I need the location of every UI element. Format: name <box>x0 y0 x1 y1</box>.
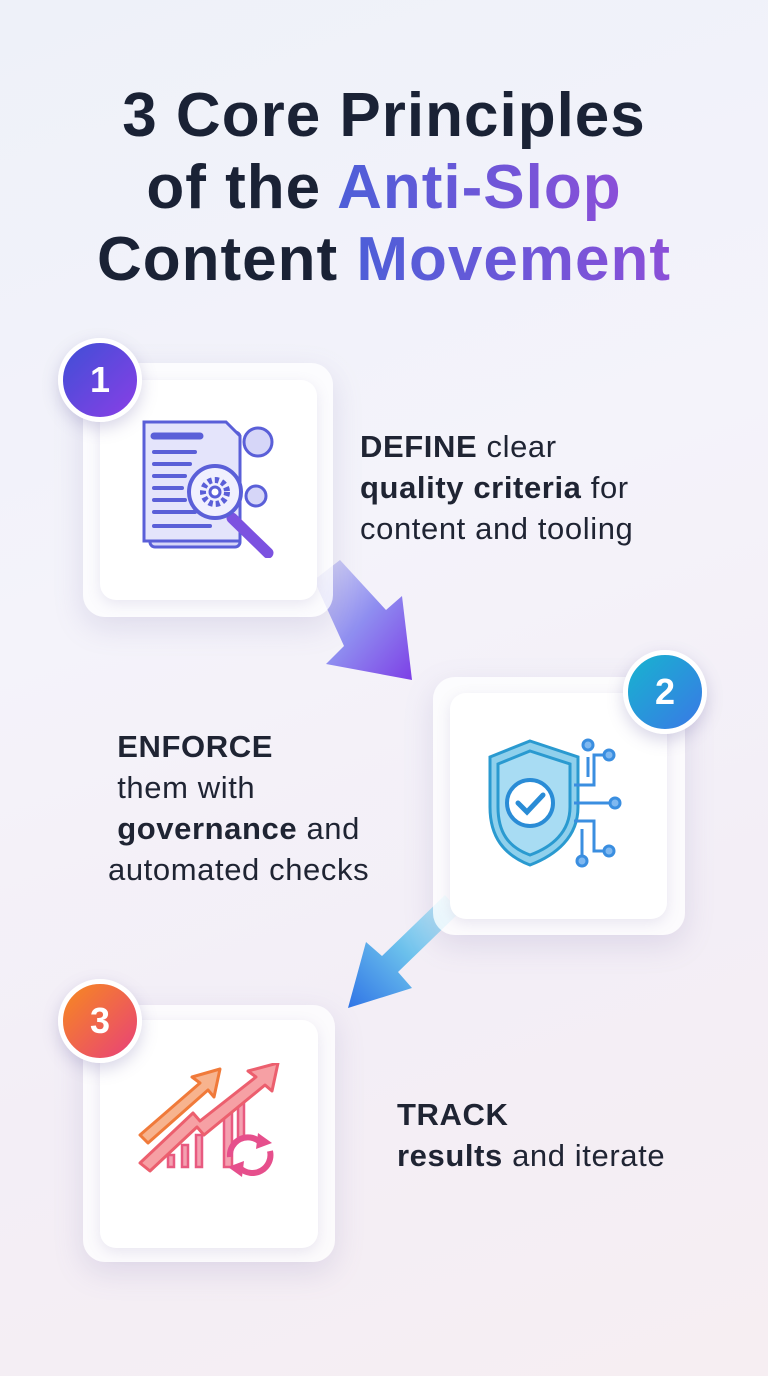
text 2 <box>108 729 369 887</box>
text 2: automated checks <box>108 852 369 887</box>
card 1 <box>83 363 333 617</box>
icon: document with magnifier and gears <box>142 420 274 558</box>
text 3: results and iterate <box>397 1138 665 1173</box>
title: of the Anti-Slop <box>146 153 622 222</box>
text 3 <box>397 1097 665 1173</box>
badge 2: 2 <box>655 671 675 712</box>
icon: growth arrows with refresh <box>138 1063 280 1177</box>
badge 1 <box>58 338 142 422</box>
text 1 <box>360 429 633 546</box>
title: 3 Core Principles <box>122 81 646 150</box>
text 2: ENFORCE <box>117 729 273 764</box>
text 2: governance and <box>117 811 360 846</box>
icon: shield with circuit <box>488 738 622 868</box>
text 1: content and tooling <box>360 511 633 546</box>
arrow: 1 to 2 <box>317 560 412 680</box>
badge 3: 3 <box>90 1000 110 1041</box>
badge 1: 1 <box>90 359 110 400</box>
title: Content Movement <box>97 225 671 294</box>
card 2 <box>433 677 685 935</box>
arrow: 2 to 3 <box>348 896 456 1008</box>
badge 2 <box>623 650 707 734</box>
title <box>97 81 671 294</box>
text 3: TRACK <box>397 1097 508 1132</box>
text 1: quality criteria for <box>360 470 629 505</box>
card 3 <box>83 1005 335 1262</box>
text 2: them with <box>117 770 255 805</box>
badge 3 <box>58 979 142 1063</box>
text 1: DEFINE clear <box>360 429 557 464</box>
